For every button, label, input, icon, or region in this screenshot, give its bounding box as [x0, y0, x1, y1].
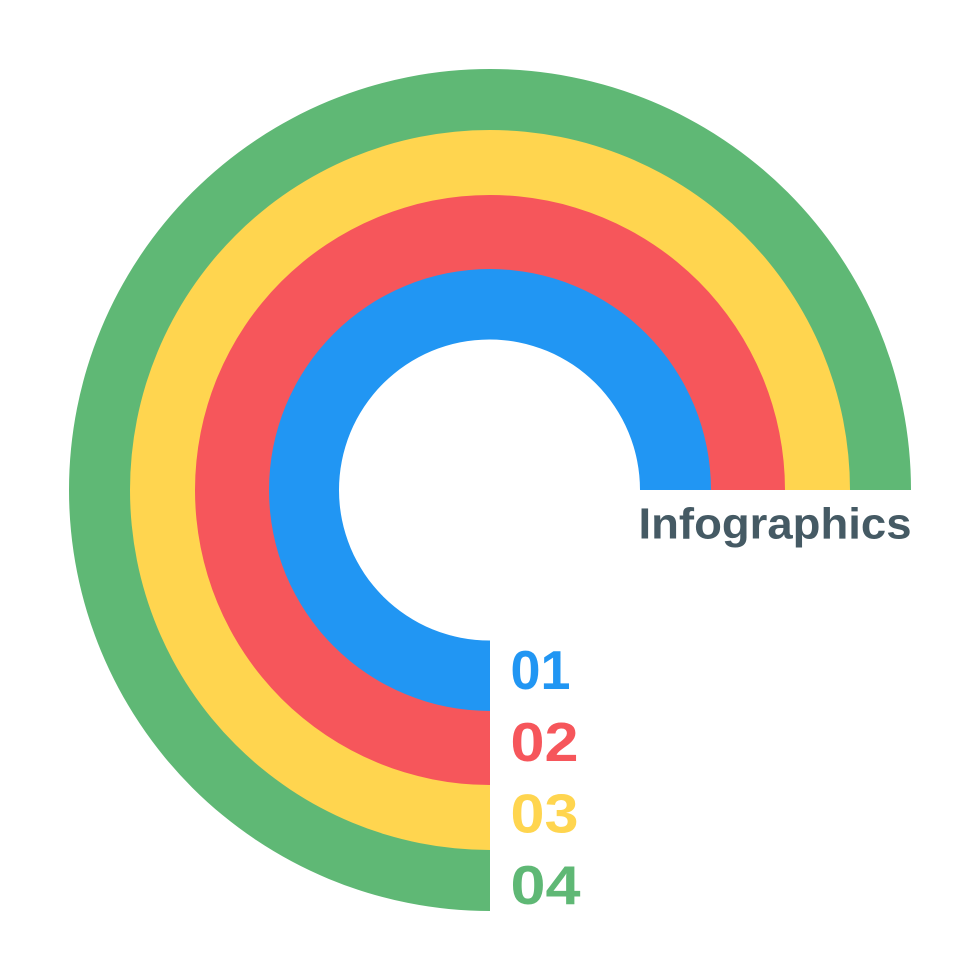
ring 04: green — [69, 69, 911, 911]
label 02: 02 — [510, 711, 578, 773]
ring 02: red — [195, 195, 785, 785]
label 01: 01 — [510, 639, 570, 701]
label 03: 03 — [510, 782, 578, 844]
ring 03: yellow — [130, 130, 850, 850]
centre cutout — [339, 340, 640, 641]
ring 01: blue — [269, 269, 711, 711]
title: Infographics — [638, 500, 912, 548]
label 04: 04 — [510, 854, 581, 916]
